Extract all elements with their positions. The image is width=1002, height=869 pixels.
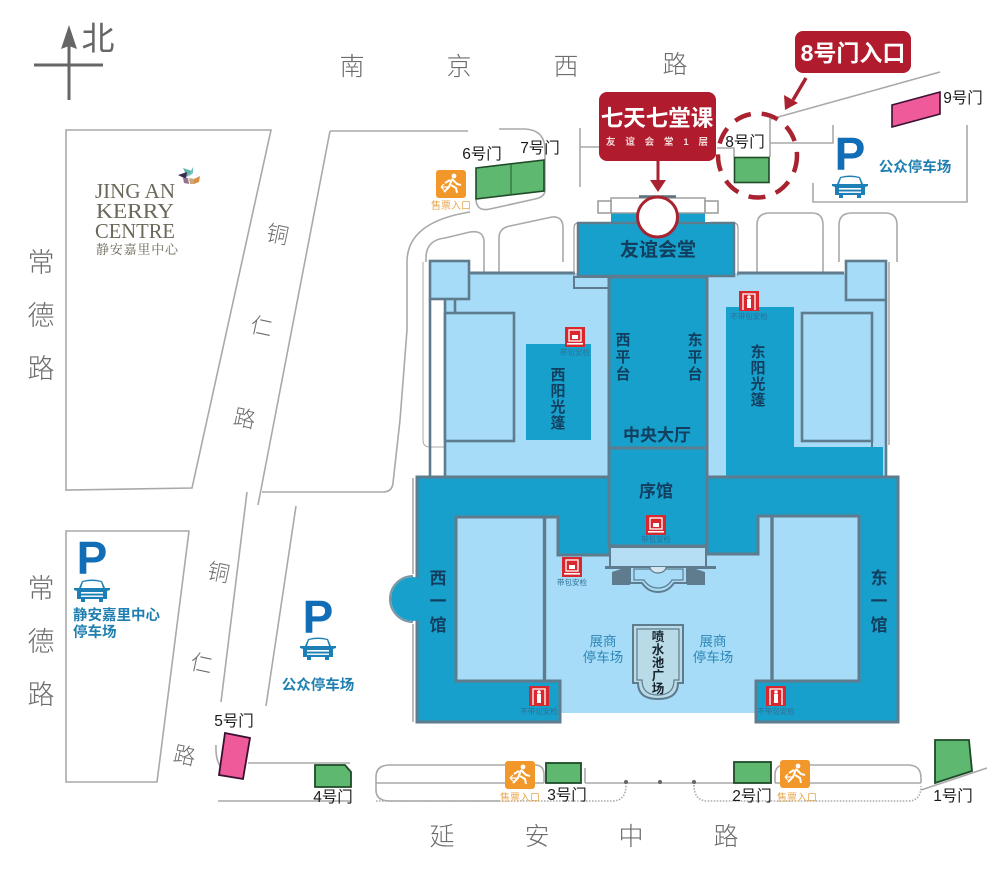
ticket entrance 3 [500, 761, 540, 804]
panel: 展商停车场 left: 停车场 [583, 649, 623, 665]
security: 不带包安检 SE: 不带包安检 [757, 706, 795, 716]
Jing An Kerry Centre logo: KERRY [96, 199, 174, 223]
panel: 喷水池广场: 场 [652, 682, 664, 696]
panel: central hall: 中央大厅 [623, 425, 691, 445]
panel: 喷水池广场: 喷 [652, 630, 665, 644]
gate 1 [933, 740, 973, 805]
security: 带包安检 序馆: 带包安检 [641, 534, 671, 544]
road name: 常德路 lower: 常 [28, 574, 54, 604]
panel: 西阳光篷: 篷 [550, 414, 566, 432]
road name: 南京西路: 京 [446, 53, 472, 81]
entrance portico [605, 547, 716, 592]
parking: Jing An Kerry Centre: 停车场 [73, 623, 116, 641]
parking: Jing An Kerry Centre [73, 532, 160, 641]
road name: 铜仁路 lower: 铜 [205, 558, 232, 587]
gate 3: 3号门 [547, 786, 587, 804]
gate 9: 9号门 [943, 89, 983, 107]
hall label: 西一馆: 一 [430, 592, 446, 611]
road name: 延安中路: 安 [524, 823, 550, 851]
security: 带包安检 courtyard: 带包安检 [557, 577, 587, 587]
road name: 南京西路: 西 [553, 53, 579, 81]
hall label: 东一馆: 东 [870, 568, 888, 588]
road name: 延安中路: 延 [429, 823, 455, 851]
panel: central hall: 序馆 [639, 481, 673, 501]
hall label: 东一馆: 馆 [870, 615, 888, 635]
panel: 东阳光篷: 光 [750, 376, 766, 393]
panel: 喷水池广场 [633, 625, 683, 699]
ticket entrance NW: 售票入口 [431, 199, 471, 212]
panel: central hall: 台 [687, 365, 703, 383]
callout: 七天七堂课 [599, 92, 716, 161]
gate 2: 2号门 [732, 787, 772, 805]
marker: 友谊会堂 1层 circle [638, 197, 678, 237]
panel: 西阳光篷: 光 [550, 399, 566, 416]
hall label: 西一馆: 西 [430, 569, 446, 588]
Jing An Kerry Centre logo: JING AN [95, 179, 175, 203]
parking: public north-east [832, 128, 951, 198]
security: 带包安检 courtyard [557, 557, 587, 587]
security: 不带包安检 SE [757, 686, 795, 716]
callout: 七天七堂课: 七天七堂课 [601, 106, 714, 131]
gates 6 and 7: 7号门 [520, 139, 560, 157]
callout: 8号门入口: 8号门入口 [801, 40, 905, 66]
gate 1: 1号门 [933, 787, 973, 805]
road name: 常德路 upper [28, 248, 54, 384]
panel: central hall: 西 [615, 332, 631, 349]
road name: 常德路 upper: 常 [28, 248, 54, 278]
panel: central hall [609, 277, 707, 546]
panel: central hall: 平 [687, 349, 703, 366]
panel: 展商停车场 left [583, 634, 623, 665]
panel: 西阳光篷 [526, 344, 591, 440]
Jing An Kerry Centre logo: CENTRE [95, 219, 175, 243]
panel: 西阳光篷: 阳 [550, 383, 566, 400]
ticket entrance 2 [777, 760, 817, 804]
highlight: dashed circle around gate 8 [718, 114, 797, 198]
security: 不带包安检 SW [520, 686, 558, 716]
gates 6 and 7 [462, 139, 560, 199]
road name: 延安中路: 路 [713, 823, 739, 851]
gate 8: 8号门 [725, 133, 765, 151]
security: 带包安检 序馆 [641, 515, 671, 544]
parking: public north-east: 公众停车场 [879, 158, 951, 176]
Jing An Kerry Centre logo [95, 167, 200, 258]
compass [34, 20, 114, 100]
road name: 南京西路 [339, 51, 688, 81]
security: 不带包安检 east: 不带包安检 [730, 311, 768, 321]
panel: 展商停车场 right: 停车场 [693, 649, 733, 665]
ticket entrance 3: 售票入口 [500, 791, 540, 804]
road outlines [66, 72, 987, 801]
road name: 延安中路: 中 [618, 823, 644, 851]
parking: public centre: P [303, 591, 333, 643]
gate 5 [214, 712, 254, 779]
upper light-blue halls [430, 261, 886, 477]
road dots [624, 780, 696, 784]
road name: 常德路 lower [28, 574, 54, 710]
gate 4 [313, 765, 353, 806]
panel: central hall: 台 [615, 365, 631, 383]
road name: 常德路 lower: 路 [28, 680, 54, 710]
panel: 东阳光篷 [726, 307, 883, 477]
gate 2 [732, 762, 772, 805]
road name: 南京西路: 路 [662, 51, 688, 79]
panel: 东阳光篷: 篷 [750, 391, 766, 409]
road name: 铜仁路 lower: 路 [171, 741, 198, 770]
parking: Jing An Kerry Centre: 静安嘉里中心 [73, 606, 160, 624]
parking: public centre: 公众停车场 [282, 676, 354, 694]
callout: 8号门入口 [795, 31, 911, 73]
panel: 喷水池广场: 池 [652, 655, 665, 670]
panel: central hall: 平 [615, 349, 631, 366]
security: 不带包安检 SW: 不带包安检 [520, 706, 558, 716]
road name: 铜仁路 upper: 仁 [248, 312, 275, 341]
panel: 展商停车场 right: 展商 [700, 634, 726, 649]
panel: 东阳光篷: 阳 [750, 360, 766, 377]
panel: 东阳光篷: 东 [750, 343, 766, 361]
road name: 延安中路 [429, 823, 739, 851]
parking: public centre [282, 591, 354, 694]
security: 带包安检 west: 带包安检 [560, 347, 590, 357]
panel: 展商停车场 right [693, 634, 733, 665]
ticket entrance 2: 售票入口 [777, 791, 817, 804]
road name: 铜仁路 lower: 仁 [188, 649, 215, 678]
parking: Jing An Kerry Centre: P [77, 532, 107, 584]
panel: 友谊会堂: 友谊会堂 [620, 238, 696, 261]
gate 8 [725, 133, 769, 182]
security: 不带包安检 east [730, 291, 768, 321]
road name: 常德路 upper: 德 [28, 301, 54, 331]
road name: 铜仁路 upper [231, 220, 291, 433]
gates 6 and 7: 6号门 [462, 145, 502, 163]
security: 带包安检 west [560, 327, 590, 357]
road name: 铜仁路 upper: 路 [231, 404, 258, 433]
road name: 铜仁路 lower [171, 558, 232, 770]
hall label: 西一馆: 馆 [430, 615, 446, 635]
gate 3 [546, 763, 587, 804]
panel: 喷水池广场: 广 [652, 668, 664, 683]
ticket entrance NW [431, 170, 471, 212]
arrow: 8号门入口 to gate [784, 78, 806, 110]
arrow: callout to hall [650, 161, 666, 192]
panel: 西阳光篷: 西 [550, 367, 566, 384]
gate 5: 5号门 [214, 712, 254, 730]
compass: 北 [82, 20, 114, 57]
callout: 七天七堂课: 友 谊 会 堂 1 层 [606, 136, 708, 148]
road name: 南京西路: 南 [339, 53, 365, 81]
hall label: 西一馆 [430, 569, 446, 635]
panel: central hall: 东 [687, 331, 703, 349]
road name: 铜仁路 upper: 铜 [264, 220, 291, 249]
road name: 常德路 lower: 德 [28, 627, 54, 657]
gate 9 [892, 89, 983, 127]
hall label: 东一馆 [870, 568, 888, 635]
courtyard and lower halls [390, 477, 898, 722]
Jing An Kerry Centre logo: 静安嘉里中心 [96, 239, 179, 258]
hall label: 东一馆: 一 [870, 592, 888, 611]
panel: 展商停车场 left: 展商 [590, 634, 616, 649]
road name: 常德路 upper: 路 [28, 354, 54, 384]
panel: 喷水池广场: 水 [652, 642, 665, 657]
parking: public north-east: P [835, 128, 865, 180]
gate 4: 4号门 [313, 788, 353, 806]
panel: 友谊会堂 [574, 196, 738, 276]
